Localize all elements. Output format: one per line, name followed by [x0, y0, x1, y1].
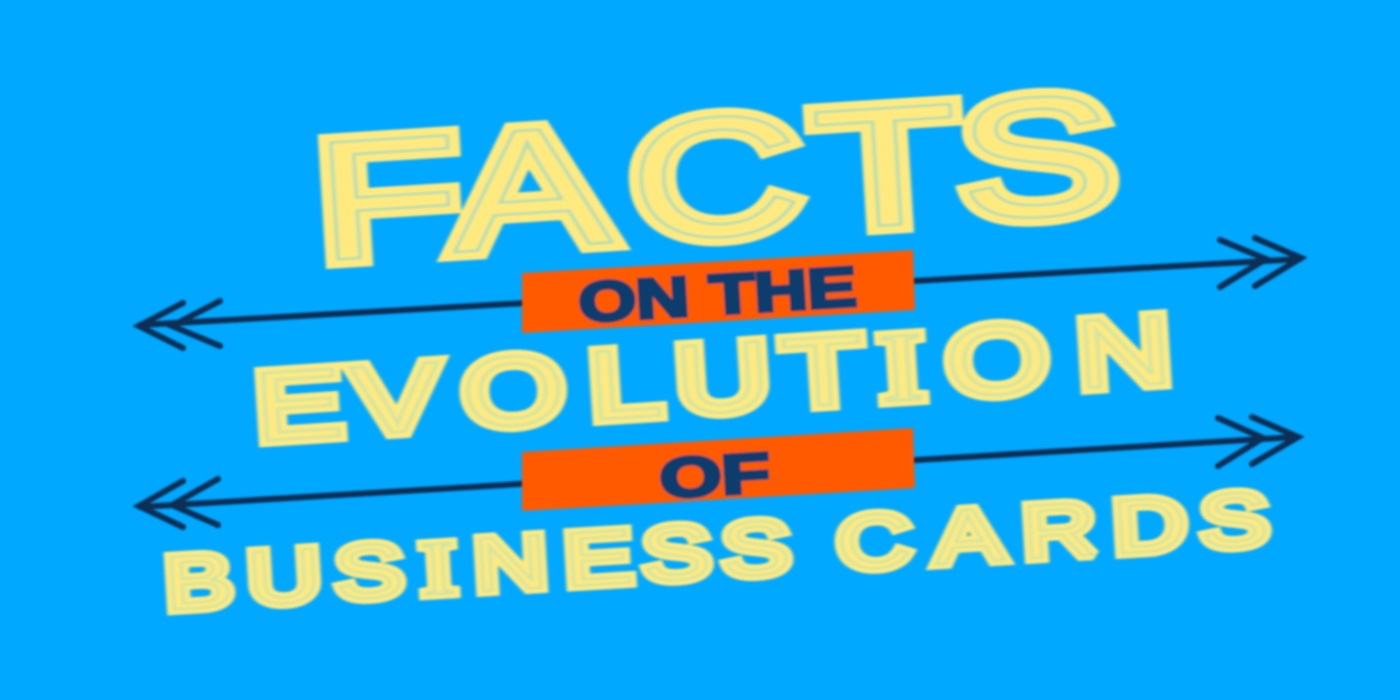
heading: facts: FACTS: [309, 57, 1122, 297]
arrow: lower double-headed: [139, 417, 1298, 527]
banner: on the: ON THE: [577, 255, 858, 334]
arrow: upper double-headed: [139, 238, 1301, 348]
heading: evolution: EVOLUTION: [251, 294, 1175, 463]
heading: evolution: EVOLUTION: [251, 294, 1175, 463]
heading: facts: FACTS: [309, 57, 1122, 297]
heading: business cards: BUSINESS CARDS: [162, 476, 1271, 627]
banner: of: OF: [658, 441, 772, 510]
banner: of: [522, 428, 915, 511]
banner: on the: [522, 250, 915, 334]
heading: business cards: BUSINESS CARDS: [162, 476, 1271, 627]
